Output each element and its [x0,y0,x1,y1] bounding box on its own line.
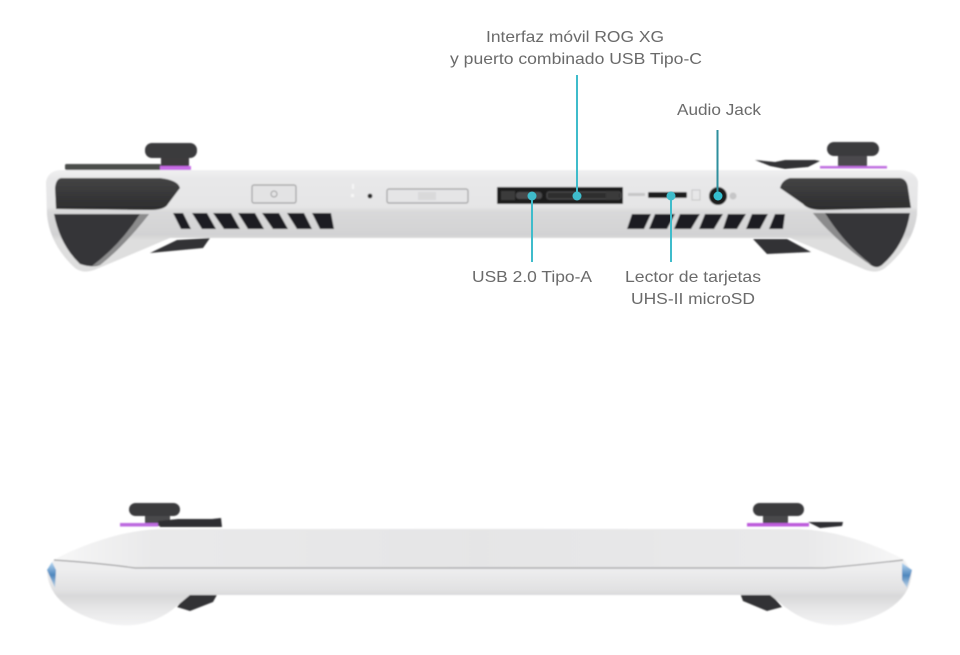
left small trigger [177,593,218,611]
top view of console [46,142,918,272]
right LED [902,563,912,588]
label: card reader: Lector de tarjetas [625,269,761,286]
console shell [46,170,918,272]
microSD slot [648,192,687,198]
console shell, lower half [47,560,912,625]
left grip upper dark panel [55,178,180,210]
left small trigger [150,238,210,253]
left thumbstick, top view [65,143,197,170]
right grip lower dark panel [813,213,910,267]
right vents [627,214,785,229]
console shell, upper half [47,529,912,572]
label: USB-A: USB 2.0 Tipo-A [472,269,592,286]
right thumbstick, top view [755,142,887,169]
right grip upper dark panel [780,178,911,210]
status LEDs [351,184,372,198]
left LED [47,562,56,588]
label: card reader [625,269,761,308]
volume button [387,189,468,203]
label: XG mobile interface: y puerto combinado USB Tipo-C [450,51,702,68]
label: card reader: UHS-II microSD [631,291,755,308]
port block: USB-A and XG mobile [497,187,623,204]
label: audio jack: Audio Jack [677,102,762,119]
left thumbstick, bottom view [120,503,222,527]
seam line [54,560,903,568]
label: XG mobile interface: Interfaz móvil ROG XG [486,29,664,46]
left vents [173,213,334,229]
leader line: microSD [666,192,676,262]
leader line: audio jack [714,130,722,200]
leader line: XG mobile [572,75,582,200]
audio jack [709,187,727,205]
right thumbstick, bottom view [747,503,843,528]
bottom view of console [47,503,912,625]
home button [252,185,296,203]
port markings [628,190,736,200]
left grip lower dark panel [54,214,149,266]
right small trigger [753,239,811,254]
right small trigger [740,593,782,611]
label: XG mobile interface [450,29,702,68]
leader line: USB-A [528,192,536,262]
